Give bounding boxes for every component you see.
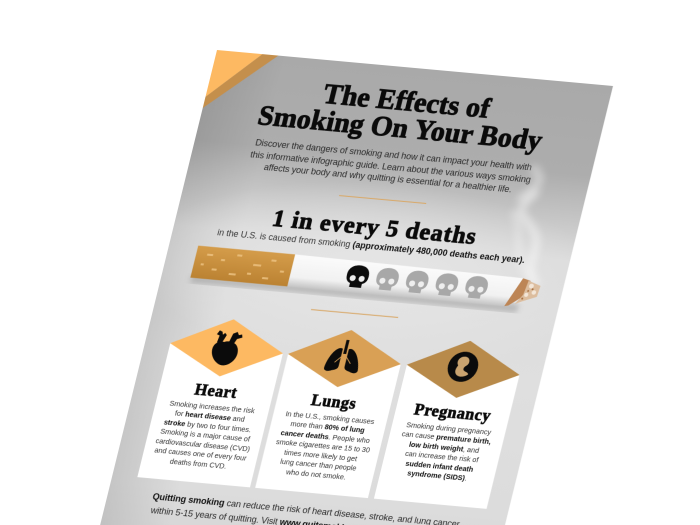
body text: sudden infant death — [405, 458, 474, 473]
icon: lungs — [323, 338, 365, 374]
statistic subtext: in the U.S. is caused from smoking (approximately 480,000 deaths each year). — [216, 227, 526, 265]
body text: can increase the risk of — [404, 449, 480, 464]
body text: times more likely to get — [283, 447, 358, 463]
body text: cancer deaths. People who — [280, 428, 371, 445]
body text: cardiovascular disease (CVD) — [155, 436, 251, 453]
heading: Lungs — [309, 392, 358, 413]
body text: stroke by two to four times. — [163, 417, 252, 434]
panel: heart — [138, 319, 283, 488]
intro text: Discover the dangers of smoking and how it can impact your health with — [254, 137, 533, 173]
icon: grey skull — [403, 270, 431, 294]
icon: grey skull — [374, 267, 401, 291]
divider — [339, 195, 426, 204]
body text: Smoking is a major cause of — [160, 426, 251, 443]
body text: can cause premature birth, — [401, 429, 492, 446]
body text: lung cancer than people — [279, 457, 358, 473]
icon: black skull — [344, 264, 371, 288]
body text — [154, 398, 256, 470]
card shape — [255, 330, 401, 498]
corner ribbon — [202, 50, 278, 108]
title: The Effects of — [320, 78, 494, 125]
title: Smoking On Your Body — [255, 100, 545, 157]
body text: and causes one of every four — [154, 445, 248, 463]
body text: Smoking increases the risk — [169, 398, 256, 415]
heading: Heart — [193, 381, 239, 402]
body text: for heart disease and — [174, 408, 246, 424]
divider — [311, 309, 398, 318]
cigarette illustration — [189, 245, 541, 314]
panel: lungs — [255, 330, 401, 498]
body text — [275, 409, 376, 481]
body text — [401, 420, 492, 483]
icon: grey skull — [463, 275, 490, 299]
body text: low birth weight, and — [408, 439, 480, 455]
intro text — [249, 137, 533, 194]
card shape — [138, 319, 283, 488]
body text: more than 80% of lung — [290, 419, 366, 434]
intro text: this informative infographic guide. Learn about the various ways smoking — [249, 149, 532, 184]
icon: grey skull — [433, 273, 460, 297]
panel: pregnancy — [374, 340, 520, 509]
card shape — [374, 340, 520, 509]
statistic heading: 1 in every 5 deaths — [270, 206, 480, 250]
body text: deaths from CVD. — [169, 456, 228, 470]
panel: tilted infographic page — [99, 50, 613, 525]
heading: Pregnancy — [412, 401, 493, 425]
body text: smoke cigarettes are 15 to 30 — [275, 437, 371, 454]
body text: Smoking during pregnancy — [405, 420, 492, 436]
body text: In the U.S., smoking causes — [285, 409, 376, 426]
body text: who do not smoke. — [285, 467, 347, 481]
body text: syndrome (SIDS). — [406, 468, 468, 483]
icon: fetus — [444, 350, 481, 383]
intro text: affects your body and why quitting is essential for a healthier life. — [263, 162, 513, 194]
icon: heart — [209, 330, 244, 367]
icon: smoke — [512, 164, 545, 283]
